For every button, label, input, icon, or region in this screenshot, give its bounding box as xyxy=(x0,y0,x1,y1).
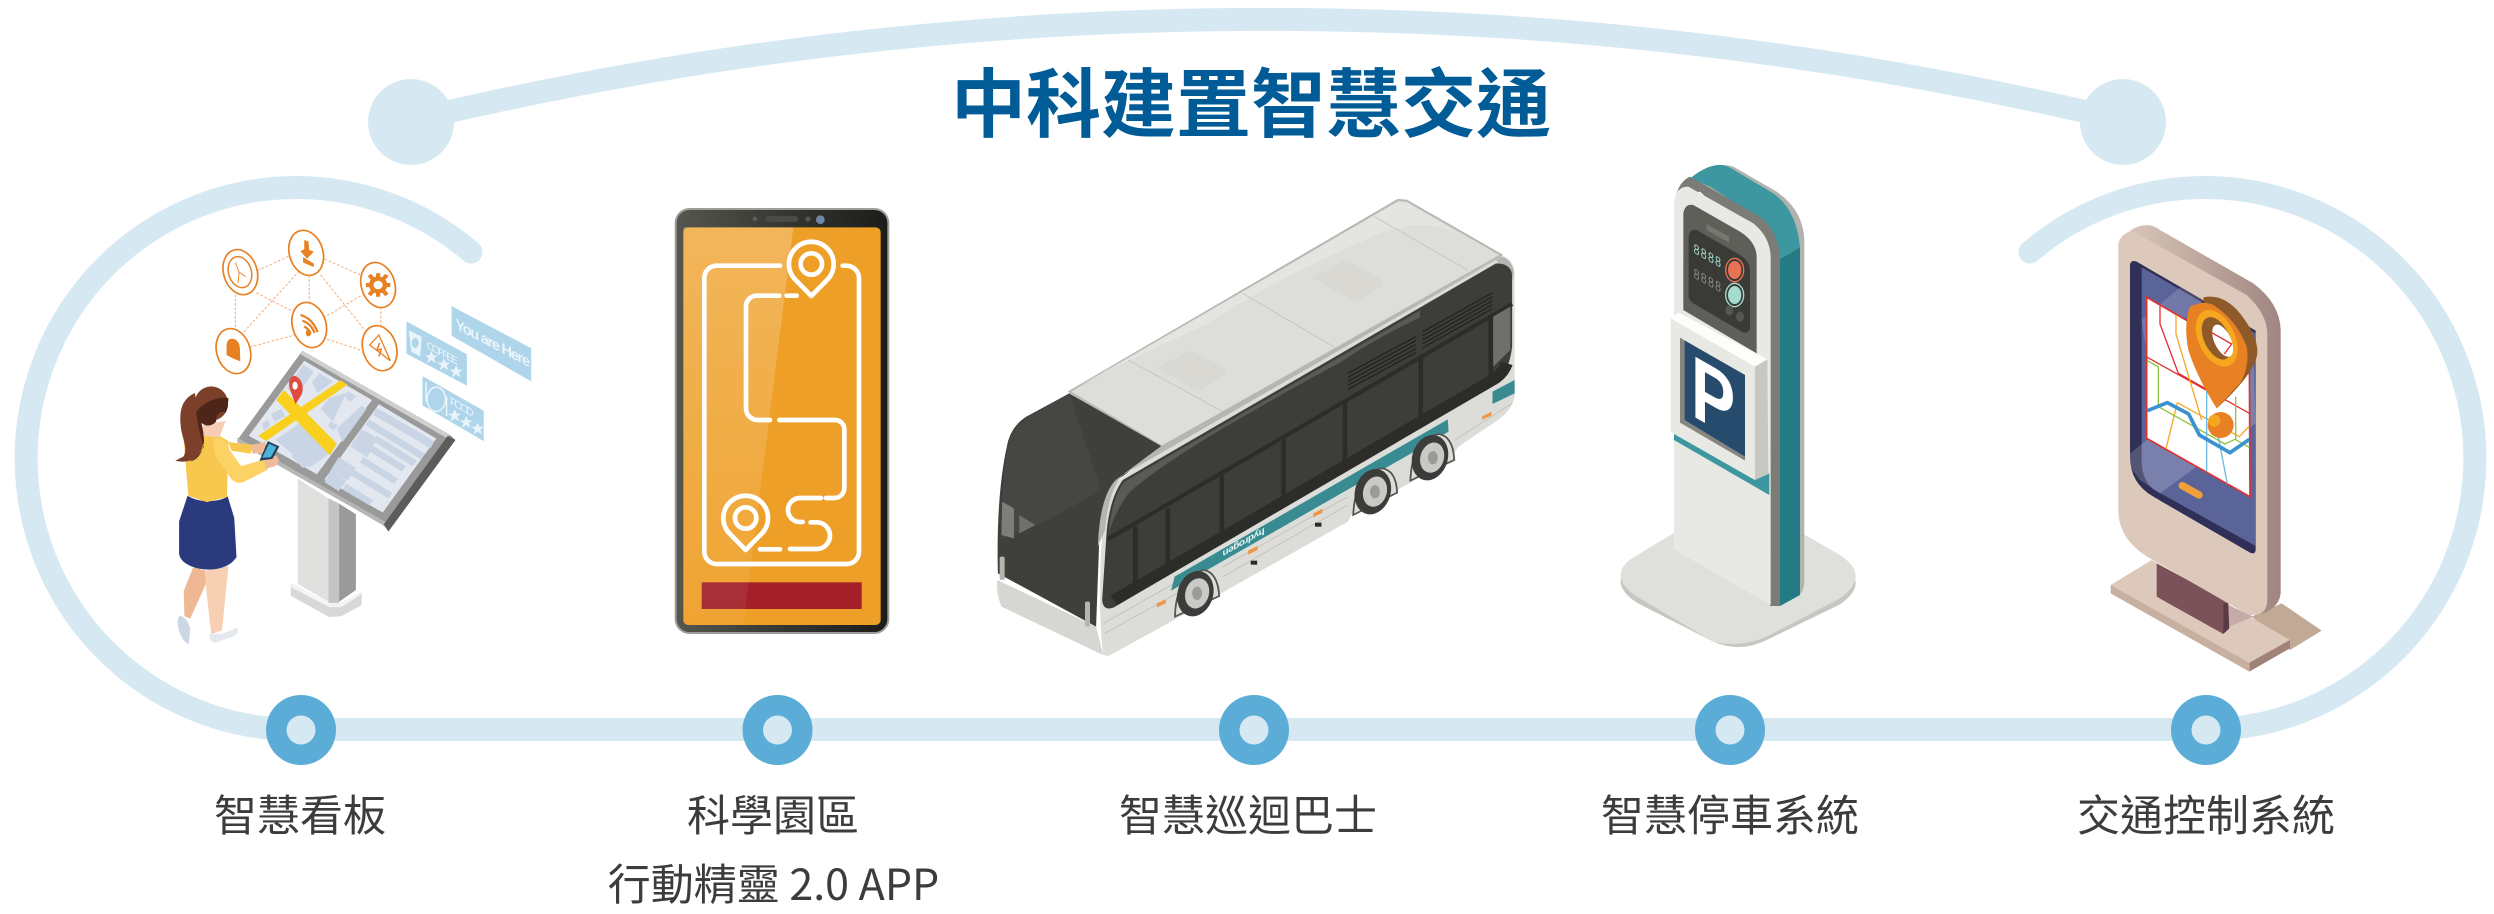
lower front xyxy=(997,580,1103,655)
title: 中科建置智慧交通 xyxy=(951,63,1551,147)
node: traffic control xyxy=(2171,695,2241,765)
parking sign xyxy=(1671,312,1769,495)
woman xyxy=(175,386,279,645)
node: smart kiosk xyxy=(266,695,336,765)
control panel: 8888 xyxy=(1693,267,1721,298)
screen xyxy=(2130,261,2256,553)
illustration: smart kiosk with woman xyxy=(175,227,531,645)
info signs: FOOD xyxy=(450,396,474,420)
label: smart parking system: 智慧停車系統 xyxy=(1601,793,1859,841)
timeline track xyxy=(26,19,2475,730)
info signs: COFFEE xyxy=(427,340,458,368)
control panel xyxy=(1683,205,1757,353)
illustration: smart shuttle bus: hydrogen xyxy=(1222,525,1265,558)
info signs: You are Here xyxy=(455,316,530,372)
side windows xyxy=(1098,257,1514,547)
kiosk stand xyxy=(291,479,362,617)
node: shuttle bus xyxy=(1219,695,1289,765)
label: traffic control system: 交通控制系統 xyxy=(2077,793,2335,841)
parking sign: P xyxy=(1691,336,1735,460)
label: smart kiosk: 智慧看板 xyxy=(214,793,386,841)
illustration: smart shuttle bus xyxy=(997,200,1515,656)
markers xyxy=(1157,412,1491,607)
node: mobile app xyxy=(742,695,812,765)
label: smart shuttle bus: 智慧巡迴巴士 xyxy=(1119,793,1377,841)
route lines xyxy=(704,242,859,564)
label: science park mobile app: 行動精靈 2.0 APP xyxy=(608,851,939,913)
label: science park mobile app: 科學園區 xyxy=(687,793,859,841)
illustration: parking meter xyxy=(1621,165,1856,647)
roof xyxy=(1069,200,1501,447)
location pin xyxy=(2186,297,2257,438)
windshield xyxy=(998,393,1162,627)
network icons xyxy=(211,227,402,377)
info signs xyxy=(406,306,531,441)
label: science park mobile app xyxy=(608,793,939,913)
illustration: smartphone with route map xyxy=(676,209,888,633)
node: parking xyxy=(1695,695,1765,765)
kiosk screen xyxy=(237,351,455,531)
control panel: 8888 xyxy=(1693,242,1721,273)
wheels xyxy=(1175,434,1454,617)
illustration: traffic control display xyxy=(2111,225,2322,672)
teal stripe xyxy=(1171,419,1449,591)
